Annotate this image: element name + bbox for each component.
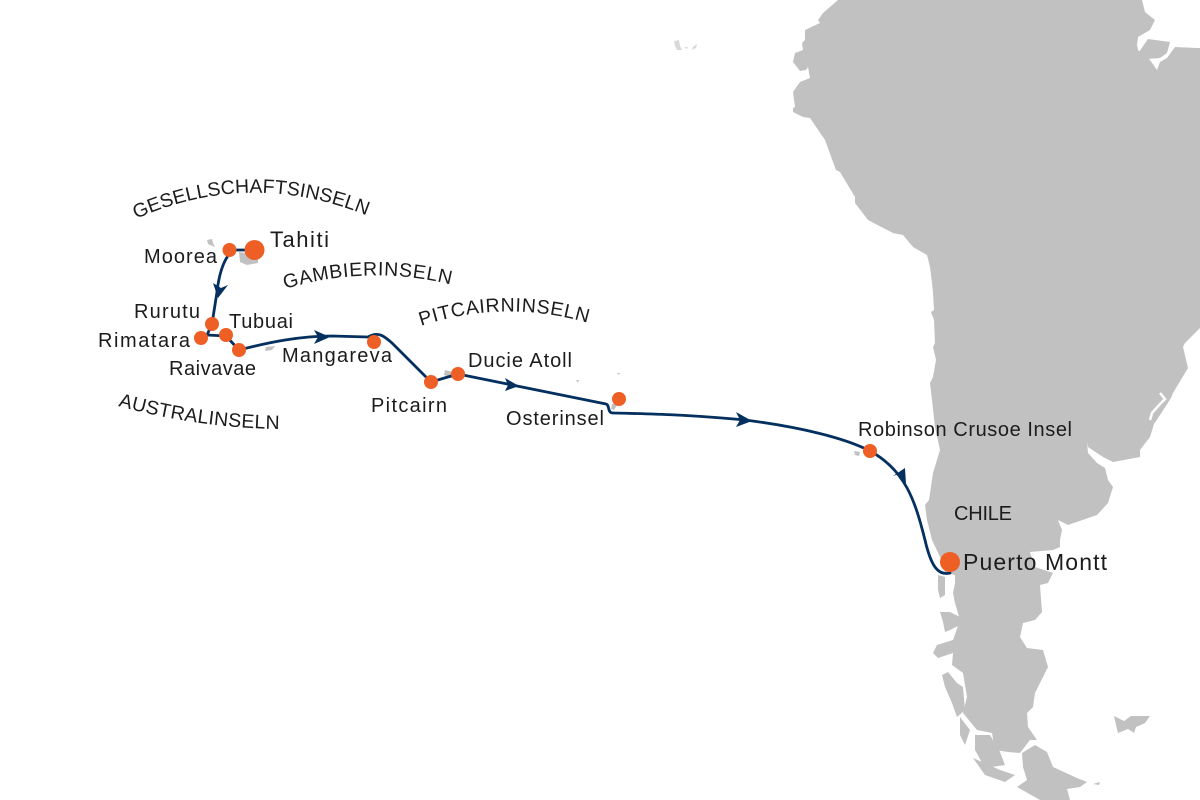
label: Puerto Montt: Puerto Montt: [963, 549, 1108, 575]
marker: Osterinsel: [612, 392, 626, 406]
label: Moorea: Moorea: [144, 246, 218, 268]
port labels: [98, 227, 1108, 575]
label: Gambierinseln: GAMBIERINSELN: [284, 262, 452, 288]
marker: Rurutu: [205, 317, 219, 331]
label: Tahiti: Tahiti: [270, 227, 329, 252]
marker: Rimatara: [194, 331, 208, 345]
label: Mangareva: Mangareva: [282, 345, 393, 367]
arrow: towards Robinson Crusoe: [736, 412, 752, 427]
label: Australinseln: AUSTRALINSELN: [118, 394, 278, 429]
curved archipelago labels: [118, 179, 590, 429]
label: Tubuai: Tubuai: [229, 311, 293, 333]
marker: Raivavae: [232, 343, 246, 357]
land: Patagonian islands: [940, 612, 1015, 782]
route line: [201, 250, 950, 574]
land: Tahiti and Moorea: [207, 239, 258, 265]
land: Falkland Islands: [1114, 716, 1150, 733]
port markers: [194, 240, 960, 572]
label: Pitcairninseln: PITCAIRNINSELN: [418, 298, 590, 326]
label: Robinson Crusoe Insel: Robinson Crusoe Insel: [858, 419, 1072, 441]
arrow: towards Puerto Montt: [893, 468, 906, 484]
land: Tierra del Fuego: [1017, 745, 1100, 800]
marker: Pitcairn: [424, 375, 438, 389]
label: Gesellschaftsinseln: GESELLSCHAFTSINSELN: [134, 179, 370, 217]
marker: Robinson Crusoe Insel: [863, 444, 877, 458]
land: Galapagos: [674, 40, 697, 50]
arrow: Moorea to Rururu: [213, 283, 228, 298]
marker: Tahiti: [244, 240, 264, 260]
arrow: towards Mangareva: [314, 330, 330, 344]
lagoon on the Atlantic coast: [1150, 393, 1165, 420]
label: Raivavae: Raivavae: [169, 358, 256, 380]
marker: Puerto Montt: [940, 552, 960, 572]
land: Chiloe island: [938, 575, 945, 598]
marker: Moorea: [222, 243, 236, 257]
land: small islets: [265, 346, 860, 456]
label: Ducie Atoll: Ducie Atoll: [468, 350, 572, 372]
label: Rurutu: Rurutu: [134, 301, 200, 323]
label: Chile: CHILE: [954, 503, 1012, 525]
label: Rimatara: Rimatara: [98, 330, 191, 352]
marker: Mangareva: [367, 335, 381, 349]
marker: Tubuai: [219, 328, 233, 342]
label: Pitcairn: Pitcairn: [371, 395, 447, 417]
land: Amazon mouth island: [1139, 39, 1170, 59]
arrowheads: [213, 283, 906, 484]
marker: Ducie Atoll: [451, 367, 465, 381]
arrow: towards Osterinsel: [505, 378, 519, 391]
label: Osterinsel: Osterinsel: [506, 408, 604, 430]
